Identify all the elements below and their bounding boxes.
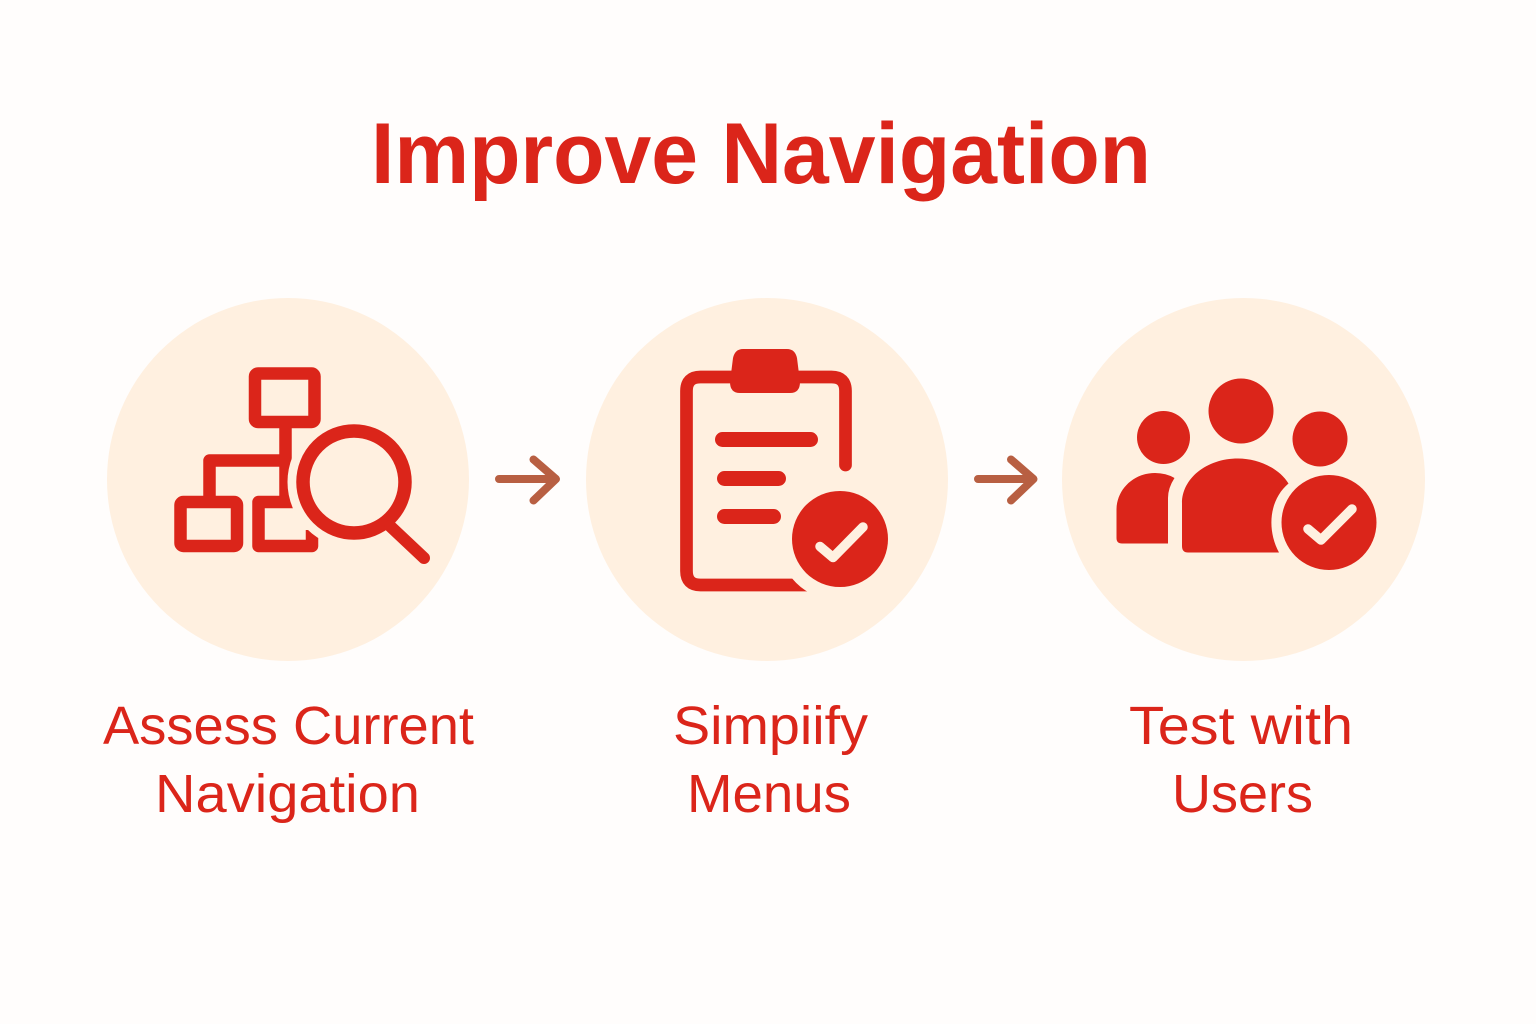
arrow: step 1 to step 2 [499, 460, 556, 500]
label: assess current navigation: Navigation [155, 764, 420, 824]
label: assess current navigation: Assess Current [103, 696, 474, 756]
label: assess current navigation [103, 696, 474, 824]
arrow: step 2 to step 3 [978, 460, 1034, 500]
circle background: step 1 [107, 298, 469, 661]
icon: group of users with check badge [1116, 378, 1376, 570]
panel: test with users [1062, 298, 1425, 824]
circle background: step 2 [586, 298, 948, 661]
panel: assess current navigation [103, 298, 474, 824]
circle background: step 3 [1062, 298, 1425, 661]
icon: sitemap with magnifying glass [180, 374, 424, 558]
icon: clipboard with check badge [686, 349, 902, 601]
title: Improve Navigation [371, 106, 1151, 202]
label: simpiify menus: Simpiify [673, 696, 868, 756]
label: test with users [1129, 696, 1353, 824]
label: test with users: Users [1172, 764, 1313, 824]
label: test with users: Test with [1129, 696, 1353, 756]
label: simpiify menus [673, 696, 868, 824]
panel: simplify menus [586, 298, 948, 824]
label: simpiify menus: Menus [687, 764, 851, 824]
